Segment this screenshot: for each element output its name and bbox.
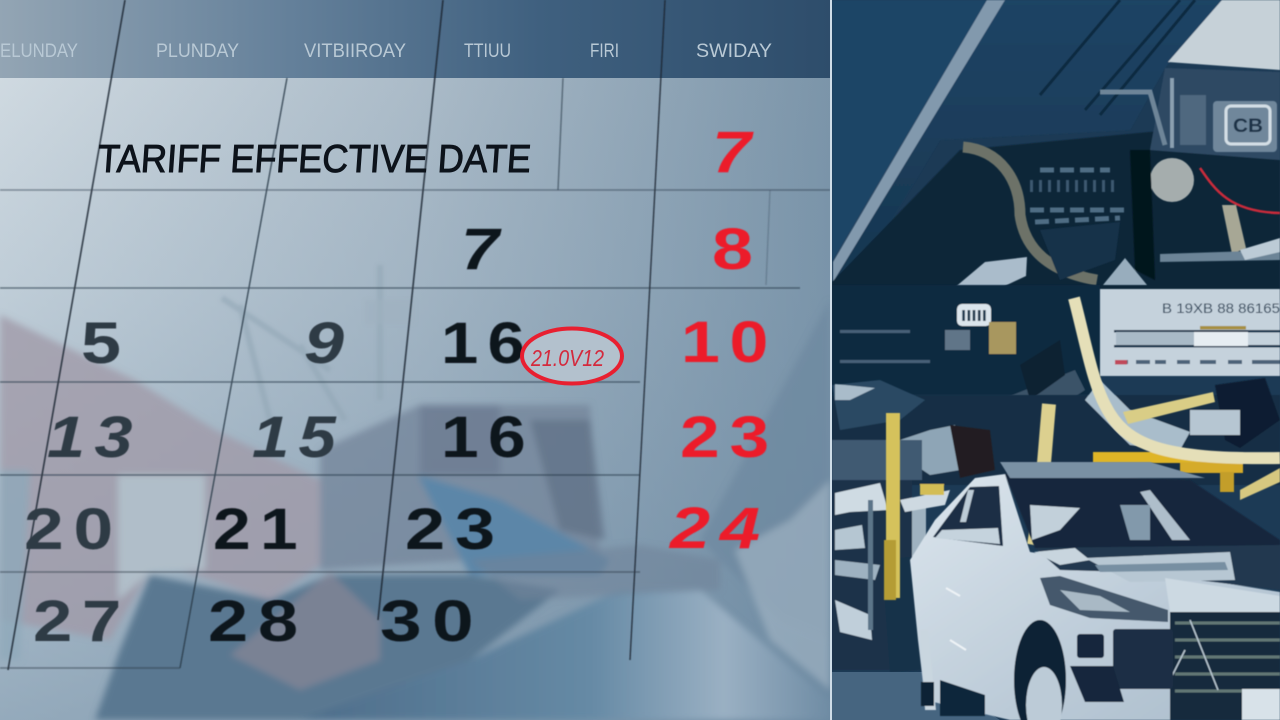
car body: [910, 474, 1280, 720]
divider between panels: [830, 0, 832, 720]
car hood and open engine bay: [1035, 545, 1280, 590]
panel: calendar: [0, 0, 830, 720]
car wheel arch and front wheel: [920, 588, 1066, 720]
control panel with readouts: B 19XB 88 86165: [1162, 300, 1280, 316]
car headlight: [1040, 576, 1168, 622]
weekday label 6: SWIDAY: [696, 41, 772, 62]
red circled date stamp: [522, 328, 622, 384]
twenty-seven: 27: [33, 589, 131, 654]
sixteen, second row: 16: [441, 405, 535, 470]
control panel with readouts: [1100, 289, 1280, 376]
car front grille: [1170, 612, 1280, 720]
twenty-one: 21: [213, 497, 307, 562]
weekday label 2: PLUNDAY: [156, 41, 239, 62]
five: 5: [81, 311, 121, 376]
weekday header band: [0, 0, 830, 78]
heading: tariff effective date: TARIFF EFFECTIVE DATE: [96, 138, 532, 181]
black seven: 7: [461, 217, 502, 282]
machine label glyph: CB: [1233, 116, 1263, 137]
overhead machine and camera box: [1100, 78, 1277, 152]
ground: [832, 672, 1000, 720]
red circled date stamp: 21.0V12: [530, 345, 604, 371]
nine: 9: [304, 311, 344, 376]
mid-level dark machinery: [832, 284, 1100, 396]
thirty: 30: [380, 589, 484, 654]
weekday label 1: ELUNDAY: [0, 41, 78, 62]
small label box: [957, 304, 991, 326]
red twenty-three: 23: [680, 405, 779, 470]
twenty-eight: 28: [208, 589, 308, 654]
port crane: [222, 266, 382, 418]
car side window: [933, 486, 1003, 546]
weekday label 3: VITBIIROAY: [304, 41, 406, 62]
background photo: container ship at port: [0, 300, 830, 720]
wiring, hoses and ducts above the car: [953, 147, 1280, 293]
red eight: 8: [712, 217, 753, 282]
weekday label 5: FIRI: [590, 41, 619, 62]
red ten: 10: [681, 310, 778, 375]
sixteen, first row: 16: [441, 311, 534, 376]
twenty-three: 23: [405, 497, 505, 562]
small label box: IIIII: [961, 308, 987, 325]
lower machinery behind the car: [832, 378, 1280, 672]
panel: car factory photo: [832, 0, 1280, 720]
fifteen: 15: [252, 405, 345, 470]
calendar numbers: [24, 120, 779, 654]
ceiling structure: [832, 0, 1280, 320]
yellow equipment bars and hoses: [884, 298, 1280, 600]
car roof and windshield: [1005, 474, 1280, 558]
twenty: 20: [24, 497, 123, 562]
car bumper intakes: [1070, 629, 1280, 720]
weekday label 4: TTIUU: [464, 41, 511, 62]
red twenty-four: 24: [669, 496, 770, 561]
car: [910, 462, 1280, 720]
red seven: 7: [712, 120, 754, 185]
thirteen: 13: [47, 405, 142, 470]
